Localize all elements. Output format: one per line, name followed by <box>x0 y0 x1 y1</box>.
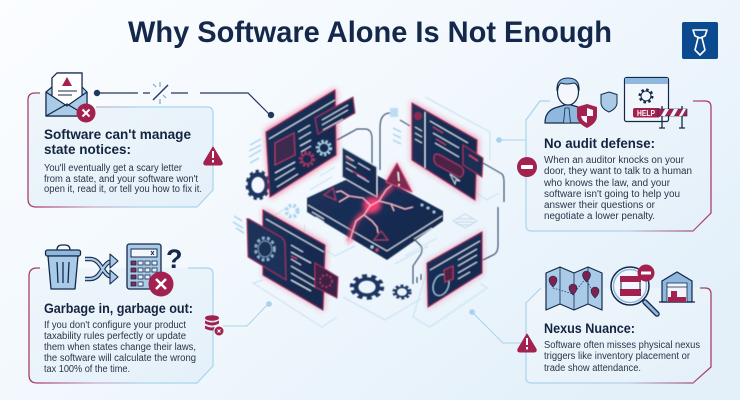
central illustration <box>233 88 504 327</box>
title: Why Software Alone Is Not Enough <box>128 16 612 49</box>
isometric floor plates <box>253 97 499 327</box>
body text <box>543 155 692 222</box>
icon: small shield <box>601 92 617 112</box>
body text: who knows the law, and your <box>543 178 671 189</box>
panel: state notices <box>28 73 222 207</box>
connector: nexus nuance <box>470 310 526 343</box>
body text: open it, read it, or tell you how to fix it. <box>44 184 202 195</box>
illustration: top-right window <box>411 101 483 202</box>
body text: the software will calculate the wrong <box>44 353 196 364</box>
body text <box>44 163 202 195</box>
heading: Nexus Nuance: <box>544 320 635 336</box>
illustration: glowing crack <box>336 184 413 246</box>
connector: state notices to top-left window <box>94 82 274 118</box>
icon: help window with barrier <box>624 78 687 128</box>
dark circuit connectors <box>337 108 504 284</box>
illustration: bottom-right window <box>426 230 483 309</box>
heading: Garbage in, garbage out: <box>44 300 193 316</box>
connector: garbage in to bottom-left window <box>223 302 271 326</box>
icon: calculator with error <box>127 244 174 296</box>
body text <box>44 320 196 375</box>
illustration: cracked server box <box>307 170 443 260</box>
body text: tax 100% of the time. <box>44 364 130 375</box>
body text: door, they want to talk to a human <box>544 166 692 177</box>
illustration: upright panel on server <box>342 147 377 197</box>
icon: help window with barrier: HELP <box>637 109 656 118</box>
icon: database error <box>205 315 224 336</box>
body text: negotiate a lower penalty. <box>544 211 655 222</box>
panel: nexus nuance <box>518 264 711 383</box>
heading: No audit defense: <box>544 135 655 151</box>
icon: warning triangle <box>518 334 536 352</box>
icon: warning triangle <box>204 147 222 165</box>
icon: person with shield <box>545 78 597 128</box>
illustration: top-left gear <box>248 172 268 198</box>
body text: Software often misses physical nexus <box>544 340 700 351</box>
body text: taxability rules perfectly or update <box>44 331 186 342</box>
panel: garbage in <box>29 244 224 383</box>
body text: You'll eventually get a scary letter <box>44 163 183 174</box>
icon: trash can <box>46 245 80 289</box>
icon: question mark: ? <box>166 244 182 274</box>
icon: magnifier over booth <box>611 264 657 314</box>
body text: software isn't going to help you <box>544 189 680 200</box>
illustration: small blue line clusters <box>233 128 477 233</box>
body text <box>544 340 700 374</box>
body text: answer their questions or <box>544 200 656 211</box>
body text: trade show attendance. <box>544 363 641 374</box>
icon: minus circle <box>517 157 537 177</box>
body text: from a state, and your software won't <box>44 174 198 185</box>
icon: warehouse <box>659 272 695 302</box>
illustration: bottom-left windows <box>247 208 338 311</box>
body text: triggers like inventory placement or <box>544 351 691 362</box>
icon: folded map with pins <box>546 267 602 310</box>
body text: If you don't configure your product <box>44 320 186 331</box>
illustration: bottom gears <box>286 206 410 298</box>
body text: When an auditor knocks on your <box>544 155 685 166</box>
body text: them when states change their laws, <box>44 342 196 353</box>
logo: tie badge <box>682 22 718 59</box>
heading: Software can't manage <box>44 126 191 142</box>
icon: envelope with warning letter <box>46 73 96 122</box>
illustration: top-left window <box>265 88 355 199</box>
illustration: warning triangle on server <box>386 163 412 192</box>
heading line 2: state notices: <box>44 141 131 157</box>
connector: audit defense <box>497 138 526 142</box>
panel: no audit defense <box>517 78 711 231</box>
icon: shuffle arrows <box>85 254 118 284</box>
